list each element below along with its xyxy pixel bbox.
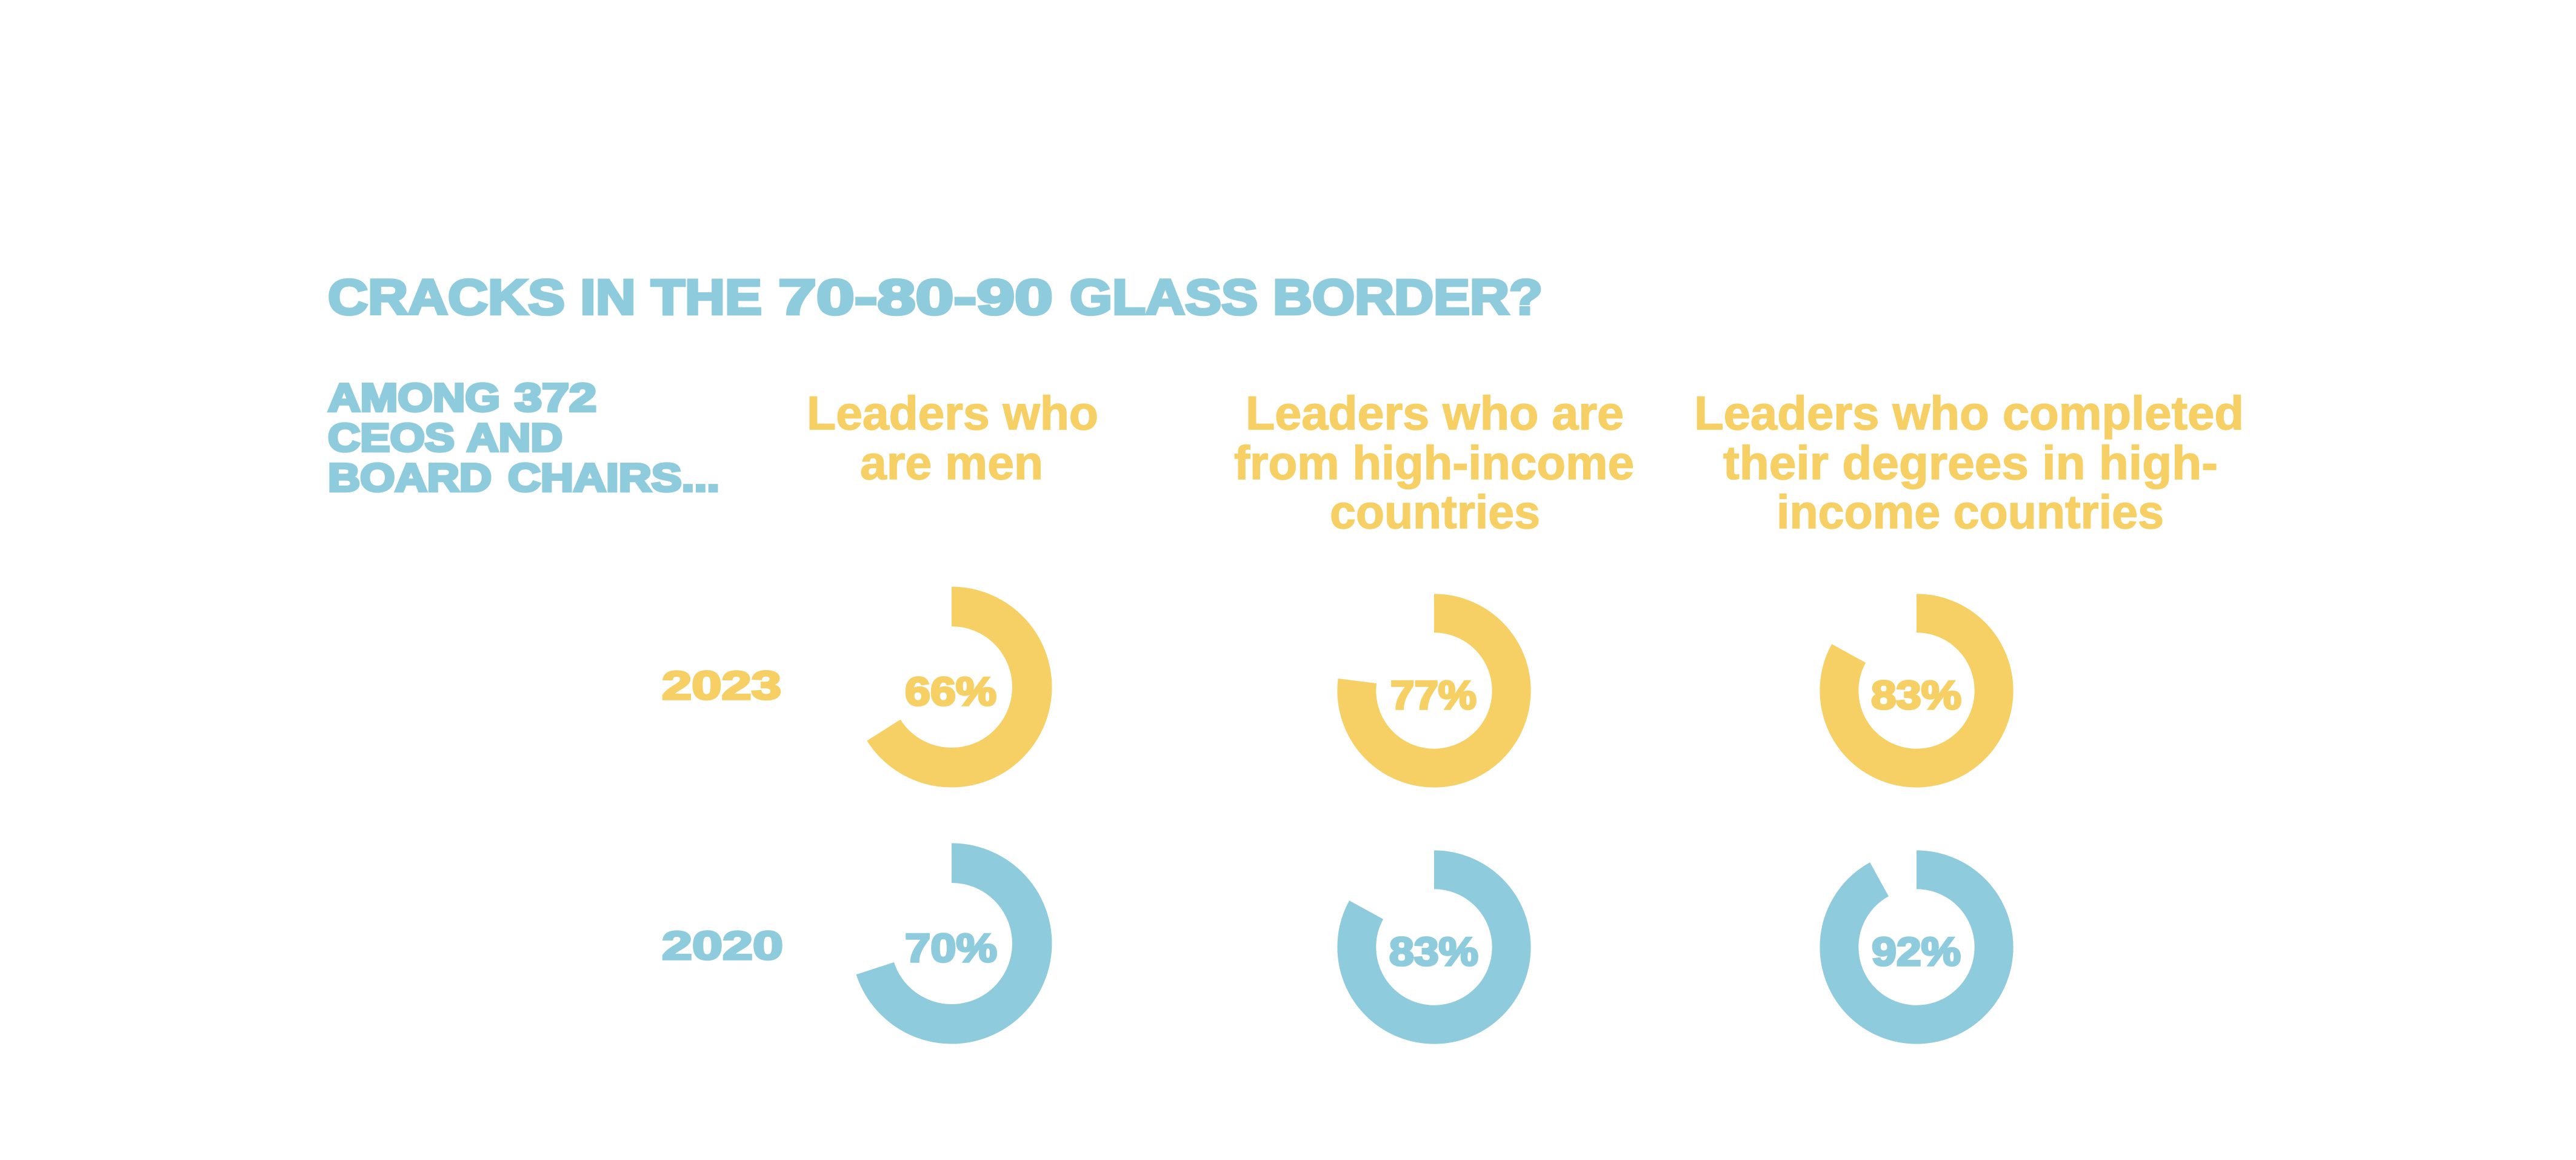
subtitle: among 372 CEOs and board chairs: AMONG (328, 375, 500, 420)
donut: 2020 high-income origin 83% (1356, 870, 1512, 1025)
title: 70-80-90 (778, 270, 1053, 325)
donut: 2020 men 70%: 70% (905, 925, 997, 970)
column heading: leaders with degrees from high-income countries: their degrees in high- (1723, 436, 2218, 489)
subtitle: among 372 CEOs and board chairs: CEOS (328, 415, 455, 460)
donut: 2023 men 66%: 66% (905, 669, 996, 714)
donut: 2020 high-income degree 92%: 92% (1872, 929, 1961, 974)
donut: 2023 high-income origin 77%: 77% (1390, 672, 1477, 717)
column heading: leaders from high-income countries: from high-income (1234, 436, 1634, 489)
title (328, 270, 1543, 325)
column heading: leaders from high-income countries: Leaders who are (1246, 386, 1624, 440)
column heading: leaders who are men (807, 386, 1098, 489)
subtitle: among 372 CEOs and board chairs: CHAIRS... (508, 455, 719, 500)
subtitle: among 372 CEOs and board chairs: 372 (515, 375, 596, 420)
subtitle: among 372 CEOs and board chairs: BOARD (328, 455, 492, 500)
subtitle: among 372 CEOs and board chairs (328, 375, 719, 500)
column heading: leaders from high-income countries (1234, 386, 1634, 538)
donut: 2023 high-income degree 83%: 83% (1871, 672, 1961, 717)
title: GLASS BORDER? (1070, 270, 1543, 325)
column heading: leaders with degrees from high-income countries (1694, 386, 2244, 538)
column heading: leaders from high-income countries: countries (1330, 485, 1540, 538)
donut: 2023 high-income degree 83% (1839, 613, 1994, 768)
column heading: leaders with degrees from high-income countries: Leaders who completed (1694, 386, 2244, 440)
column heading: leaders who are men: Leaders who (807, 386, 1098, 440)
donut: 2020 high-income degree 92% (1839, 870, 1994, 1025)
subtitle: among 372 CEOs and board chairs: AND (467, 415, 562, 460)
column heading: leaders with degrees from high-income countries: income countries (1777, 485, 2164, 538)
donut: 2023 high-income origin 77% (1356, 613, 1512, 768)
row label: 2020: 2020 (662, 923, 783, 968)
donut: 2020 men 70% (871, 863, 1032, 1024)
column heading: leaders who are men: are men (860, 436, 1043, 489)
donut: 2023 men 66% (871, 606, 1032, 768)
donut: 2020 high-income origin 83%: 83% (1389, 929, 1478, 974)
row label: 2023: 2023 (662, 663, 781, 708)
title: CRACKS IN THE (328, 270, 762, 325)
